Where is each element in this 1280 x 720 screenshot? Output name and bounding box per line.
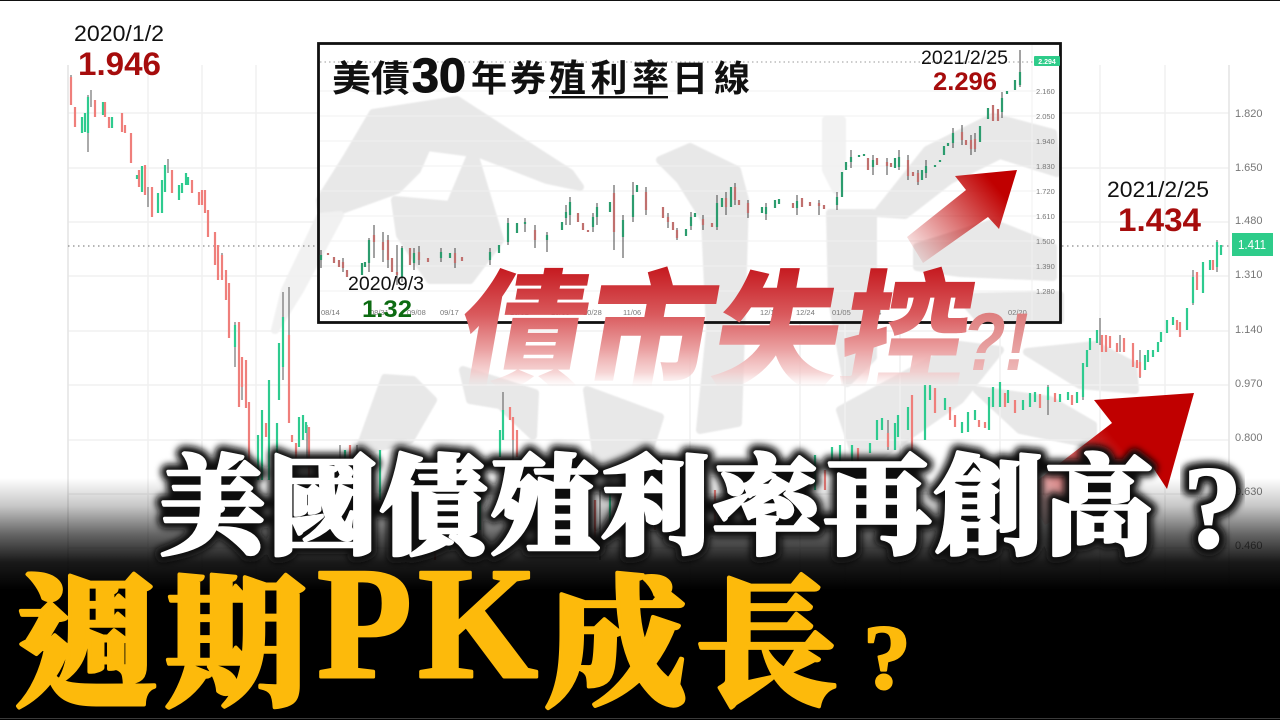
headline: 美國債殖利率再創高？: ?	[1183, 442, 1242, 573]
inset x-axis labels: 10/01	[510, 308, 529, 317]
inset red candles	[328, 105, 998, 277]
inset x-axis labels	[321, 308, 1027, 317]
headline: 債市失控?!: 債市失控	[447, 263, 983, 410]
inset panel: 30-year yield daily chart	[318, 44, 1060, 322]
main chart y-axis labels: 0.630	[1235, 486, 1263, 498]
headline: 週期PK成長？: K	[418, 534, 538, 712]
inset green candles	[321, 72, 1020, 277]
label: 2020/9/3 low 1.32: 1.32	[362, 296, 412, 323]
inset wicks	[321, 50, 1020, 285]
inset price tag 2.294: 2.294	[1038, 59, 1056, 66]
inset x-axis labels: 02/20	[1008, 308, 1027, 317]
inset x-axis labels: 09/17	[440, 308, 459, 317]
inset x-axis labels: 09/08	[407, 308, 426, 317]
inset y-axis labels	[1036, 87, 1055, 296]
headline: 美國債殖利率再創高？: 美國債殖利率再創高	[158, 449, 1153, 569]
inset x-axis labels: 10/28	[583, 308, 602, 317]
label: 2020/1/2 high 1.946: 2020/1/2	[74, 21, 164, 46]
headline: 週期PK成長？: P	[317, 534, 412, 712]
bottom edge line	[0, 718, 1280, 719]
inset y-axis labels: 1.390	[1036, 262, 1055, 271]
inset y-axis labels: 1.610	[1036, 212, 1055, 221]
main chart y-axis labels: 1.140	[1235, 324, 1263, 336]
inset title: 美債30年券殖利率日線: 殖利率	[549, 58, 669, 99]
current price tag 1.411: 1.411	[1238, 237, 1266, 252]
inset x-axis labels: 08/31	[370, 308, 389, 317]
current price tag 1.411	[1232, 233, 1273, 256]
label: 2021/2/25 1.434: 2021/2/25	[1107, 177, 1209, 202]
inset dotted price line	[320, 61, 1034, 63]
label: 2021/2/25 2.296: 2021/2/25	[921, 47, 1008, 69]
inset x-axis labels: 08/14	[321, 308, 340, 317]
inset x-axis labels: 14	[873, 308, 881, 317]
inset y-axis labels: 1.830	[1036, 162, 1055, 171]
inset x-axis labels: 10/09	[551, 308, 570, 317]
inset title: 美債30年券殖利率日線	[332, 50, 750, 103]
candle wicks	[71, 75, 1217, 560]
main chart y-axis labels: 1.480	[1235, 215, 1263, 227]
headline: 週期PK成長？	[15, 534, 911, 720]
inset title: 美債30年券殖利率日線: 美債	[332, 58, 410, 99]
inset y-axis labels: 2.160	[1036, 87, 1055, 96]
label: 2021/2/25 1.434	[1107, 177, 1209, 238]
headline: 債市失控?!: ?!	[955, 296, 1037, 388]
inset x-axis labels: 12/24	[796, 308, 815, 317]
inset y-axis labels: 1.500	[1036, 237, 1055, 246]
main chart y-axis labels: 1.820	[1235, 108, 1263, 120]
inset x-axis labels: 01/05	[832, 308, 851, 317]
inset frame	[318, 44, 1060, 322]
bottom dark gradient band	[0, 478, 1280, 590]
main chart y-axis labels: 0.800	[1235, 432, 1263, 444]
label: 2021/2/25 2.296: 2.296	[933, 68, 997, 96]
green candles	[82, 97, 1221, 550]
label: 2020/1/2 high 1.946: 1.946	[78, 46, 161, 82]
inset red arrow	[907, 170, 1017, 263]
label: 2020/9/3 low 1.32: 2020/9/3	[348, 273, 424, 295]
bottom black block	[0, 590, 1280, 720]
inset x-axis labels: 12/11	[760, 308, 778, 317]
inset title: 美債30年券殖利率日線: 日線	[672, 58, 750, 99]
main chart y-axis labels: 0.460	[1235, 540, 1263, 552]
label: 2020/9/3 low 1.32	[348, 273, 424, 323]
label: 2021/2/25 2.296	[921, 47, 1008, 96]
main chart y-axis labels: 1.310	[1235, 269, 1263, 281]
inset title: 美債30年券殖利率日線: 30	[412, 50, 466, 103]
inset y-axis labels: 2.050	[1036, 112, 1055, 121]
inset y-axis labels: 1.940	[1036, 137, 1055, 146]
current price dotted line	[68, 245, 1232, 247]
label: 2021/2/25 1.434: 1.434	[1118, 202, 1201, 238]
main chart y-axis labels	[1235, 108, 1263, 552]
inset x-axis labels: 11/06	[623, 308, 641, 317]
headline: 美國債殖利率再創高？: 美國債殖利率再創高	[158, 449, 1153, 569]
main chart y-axis labels: 0.970	[1235, 378, 1263, 390]
inset price tag 2.294	[1034, 56, 1060, 66]
inset grid	[320, 45, 1036, 320]
top edge line	[0, 0, 1280, 1]
chart grid	[68, 65, 1229, 600]
main chart y-axis labels: 1.650	[1235, 162, 1263, 174]
inset title: 美債30年券殖利率日線: 年券	[471, 58, 546, 99]
main chart: US treasury yield candlesticks	[68, 65, 1232, 600]
main chart red arrow	[1025, 393, 1194, 525]
label: 2020/1/2 high 1.946	[74, 21, 164, 82]
inset y-axis labels: 1.280	[1036, 287, 1055, 296]
headline: 週期PK成長？: ?	[863, 606, 911, 708]
background brush calligraphy watermark	[275, 100, 1135, 500]
red candles	[71, 77, 1213, 560]
headline: 美國債殖利率再創高？: ?	[1183, 442, 1242, 573]
inset y-axis labels: 1.720	[1036, 187, 1055, 196]
